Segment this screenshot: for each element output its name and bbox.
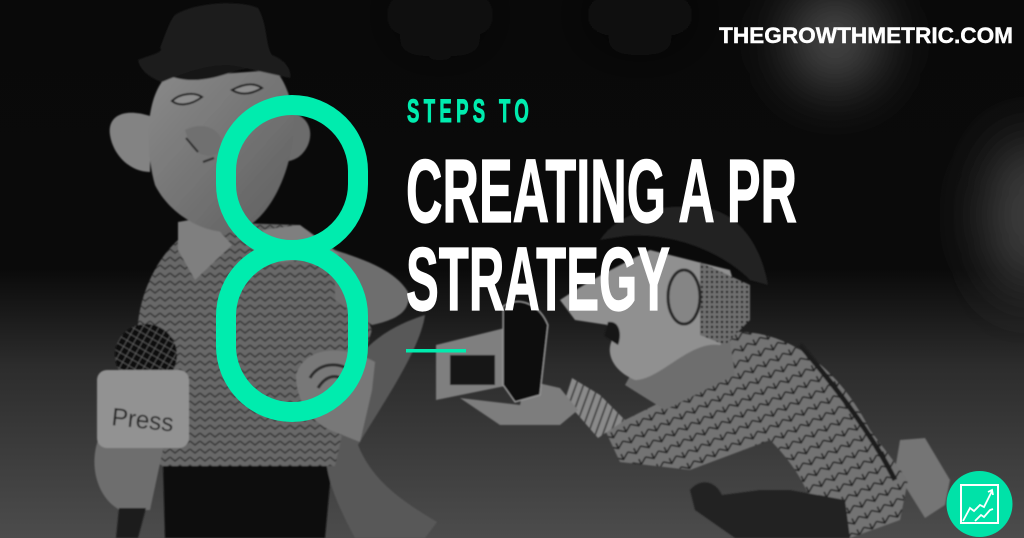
reporter left ear (110, 113, 150, 172)
reporter head (148, 70, 294, 232)
microphone label: Press (110, 403, 175, 437)
photographer neck (625, 340, 735, 410)
reporter sweater (138, 222, 372, 466)
camera body (503, 301, 548, 402)
photographer cap (600, 207, 768, 285)
photographer mouth (604, 322, 620, 345)
reporter eyebrows (165, 62, 285, 80)
rolled newspaper (296, 351, 375, 442)
photographer hair stipple (700, 262, 750, 345)
photographer hand (460, 380, 578, 425)
site url: THEGROWTHMETRIC.COM (719, 23, 1013, 48)
photographer head and nose (560, 250, 745, 380)
microphone cube (97, 370, 189, 448)
reporter hat (138, 3, 290, 82)
reporter nose and mouth shadow (185, 126, 222, 155)
reporter sleeve (335, 250, 409, 325)
reporter eyes (172, 84, 262, 104)
main heading: STRATEGY (406, 230, 670, 330)
heading kicker: steps to: STEPS TO (407, 93, 529, 129)
reporter right ear (280, 112, 310, 162)
accent rule (406, 349, 466, 352)
reporter collar (178, 217, 340, 280)
figure: reporter with microphone (94, 3, 437, 538)
reporter trousers (163, 462, 332, 538)
microphone head (115, 324, 177, 386)
camera bellows (436, 328, 510, 400)
photographer cuff (565, 378, 625, 438)
photographer ear (668, 270, 700, 324)
reporter hand (94, 440, 165, 510)
microphone handle (116, 508, 146, 538)
logo badge (946, 471, 1012, 537)
photographer sweater and arm (605, 332, 908, 538)
main heading (406, 142, 797, 330)
reporter arm and hand (326, 315, 437, 538)
photographer side camera (690, 482, 850, 538)
photographer back holster (895, 438, 950, 518)
photographer suspender strap (800, 345, 895, 480)
figure: photographer with camera (436, 207, 950, 538)
numeral 8 (226, 105, 358, 412)
